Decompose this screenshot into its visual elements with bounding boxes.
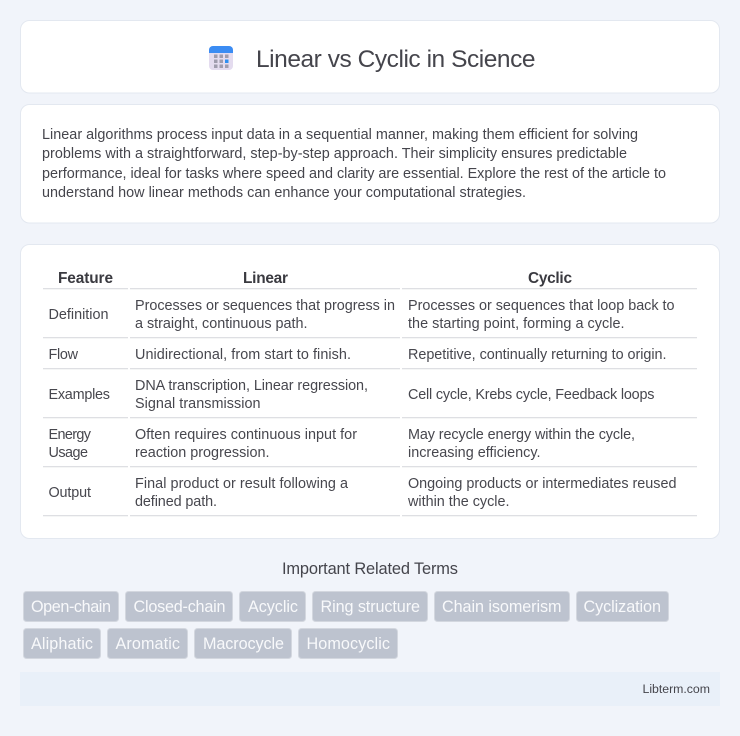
table header row: Feature (58, 270, 113, 287)
tag list: Acyclic (248, 598, 298, 616)
row: output: Final product or result following a (135, 476, 348, 492)
row: flow: Flow (48, 347, 79, 363)
row: definition: the starting point, forming a cycle. (408, 316, 624, 332)
intro paragraph (42, 127, 666, 201)
panel: header (20, 20, 720, 93)
row: definition: Processes or sequences that loop back to (408, 298, 674, 314)
intro paragraph: problems with a straightforward, step-by-step approach. Their simplicity ensures predictable (42, 146, 627, 162)
heading: related terms: Important Related Terms (282, 560, 458, 578)
row: energy usage: Usage (48, 445, 88, 461)
row: energy usage (48, 427, 635, 461)
row: energy usage: increasing efficiency. (408, 445, 540, 461)
tag list: Ring structure (320, 598, 420, 616)
row: energy usage: Often requires continuous input for (135, 427, 357, 443)
row: energy usage: Energy (48, 427, 92, 443)
row: definition (48, 298, 674, 332)
tag list: Chain isomerism (442, 598, 562, 616)
row: examples: Cell cycle, Krebs cycle, Feedback loops (408, 387, 654, 403)
tag list: Aromatic (116, 635, 180, 653)
tag list: Cyclization (584, 598, 661, 616)
panel: comparison table (20, 244, 720, 538)
footer (20, 672, 720, 706)
tag list: Homocyclic (306, 635, 390, 653)
icon: calendar (209, 46, 233, 70)
table header row: Cyclic (528, 270, 572, 287)
row: output: Output (48, 485, 91, 501)
tag list: Aliphatic (31, 635, 93, 653)
title: Linear vs Cyclic in Science (256, 46, 536, 73)
intro paragraph: Linear algorithms process input data in a sequential manner, making them efficient for solving (42, 127, 638, 143)
tag list: Macrocycle (203, 635, 284, 653)
row: flow (48, 347, 666, 363)
row: examples (48, 378, 654, 412)
tag list: Open-chain (31, 598, 111, 616)
intro paragraph: performance, ideal for tasks where speed and clarity are essential. Explore the rest of the article to (42, 166, 666, 182)
row: flow: Repetitive, continually returning to origin. (408, 347, 666, 363)
row: flow: Unidirectional, from start to finish. (135, 347, 351, 363)
table header row (58, 270, 572, 287)
table header row: Linear (243, 270, 288, 287)
row: output: Ongoing products or intermediates reused (408, 476, 676, 492)
row: examples: Examples (48, 387, 110, 403)
row: energy usage: May recycle energy within the cycle, (408, 427, 635, 443)
row: output (48, 476, 676, 510)
panel: intro text (20, 104, 720, 223)
row: examples: Signal transmission (135, 396, 260, 412)
table rules (43, 288, 697, 516)
row: output: defined path. (135, 494, 217, 510)
row: examples: DNA transcription, Linear regression, (135, 378, 368, 394)
row: energy usage: reaction progression. (135, 445, 270, 461)
footer: Libterm.com (642, 682, 710, 696)
row: definition: a straight, continuous path. (135, 316, 308, 332)
tag list (24, 592, 668, 658)
tag list: Closed-chain (134, 598, 226, 616)
row: output: within the cycle. (407, 494, 510, 510)
row: definition: Definition (48, 307, 108, 323)
row: definition: Processes or sequences that progress in (135, 298, 395, 314)
intro paragraph: understand how linear methods can enhance your computational strategies. (42, 185, 526, 201)
